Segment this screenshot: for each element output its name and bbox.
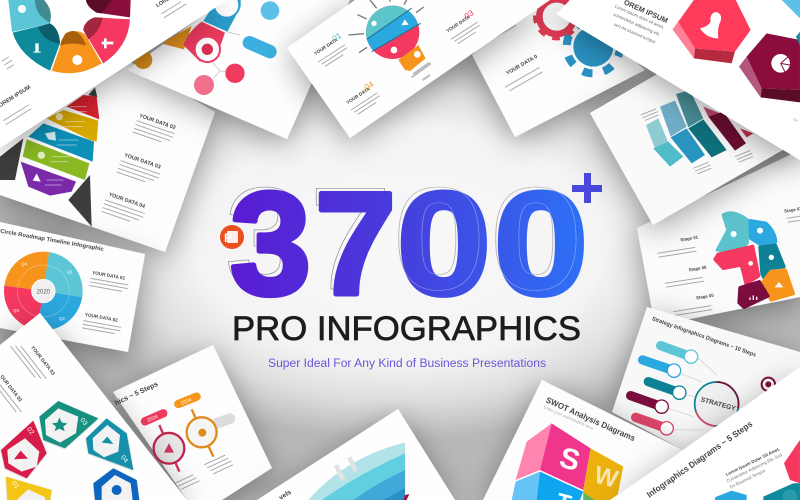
hexagon diagram: 04 bbox=[119, 454, 129, 465]
text: your data 02: YOUR DATA 03 bbox=[123, 153, 161, 171]
gradient digits: 0 bbox=[494, 162, 588, 325]
chart: segmented pie bbox=[8, 0, 131, 73]
chart: roadmap wheel: 2020 bbox=[37, 289, 51, 295]
text: data notes: YOUR DATA 0 bbox=[505, 54, 539, 77]
text: your data 02 bbox=[101, 113, 176, 225]
timeline diagram: 2024 bbox=[146, 414, 159, 424]
chart: roadmap wheel: Q4 bbox=[21, 261, 27, 266]
heading: 5 steps: hics ~ 5 Steps bbox=[114, 381, 159, 407]
gradient digits: 0 bbox=[397, 162, 491, 325]
text: stages: Stage 06 bbox=[688, 264, 707, 272]
panel: 5 steps diagrams card bbox=[610, 367, 800, 500]
text: your data 03 and 02 bbox=[0, 341, 56, 415]
text: your data 01 and 02: YOUR DATA 02 bbox=[84, 312, 119, 323]
rocket diagram bbox=[0, 87, 99, 227]
panel: hexagon steps card bbox=[0, 313, 187, 500]
text: lorem ipsum notes bbox=[0, 0, 186, 125]
light outlines over zeros: 0 bbox=[392, 157, 486, 320]
offset outlines of digits: 3 bbox=[225, 157, 306, 320]
text: your data 03 and 02: YOUR DATA 03 bbox=[29, 345, 56, 377]
heading: SWOT: Enter your subheadline here bbox=[543, 404, 595, 431]
chart: roadmap wheel bbox=[4, 252, 83, 330]
text: lorem ipsum: Consectetur Adipiscing Elit, Sed bbox=[726, 452, 783, 484]
strategy pills bbox=[631, 346, 775, 435]
heading: SWOT: SWOT Analysis Diagrams bbox=[544, 395, 637, 443]
text: data labels: 04 bbox=[362, 79, 376, 92]
strategy ring: STRATEGY bbox=[700, 397, 737, 413]
hexagon diagram bbox=[1, 401, 139, 500]
text: data labels: YOUR DATA bbox=[445, 14, 471, 34]
text: data labels: 01 bbox=[330, 30, 343, 44]
panel: 3D bars card bbox=[590, 55, 800, 225]
hexagon diagram: 02 bbox=[25, 426, 35, 437]
text: your data 02: YOUR DATA 04 bbox=[108, 192, 146, 210]
text: lorem ipsum: Lorem ipsum dolor sit amet, bbox=[614, 4, 665, 30]
icon: PowerPoint badge bbox=[220, 225, 244, 249]
text: stages: Stage 01 bbox=[680, 235, 699, 242]
puzzle diagram bbox=[715, 213, 793, 307]
panel: timeline steps card bbox=[113, 345, 272, 500]
text: data labels bbox=[313, 7, 482, 116]
text: lorem ipsum: Lorem Ipsum Dolor Sit Amet, bbox=[725, 446, 781, 477]
panel: horse puzzle card bbox=[637, 150, 800, 326]
panel: SWOT card bbox=[483, 380, 683, 500]
text: lorem ipsum: consectetur adipiscing elit, bbox=[613, 12, 661, 37]
panel: hexagon 3D card bbox=[556, 0, 800, 160]
text: lorem ipsum: Do Eiusmod Tempor bbox=[729, 468, 767, 490]
chart: roadmap wheel: Q1 bbox=[67, 269, 73, 274]
title: 3700+ bbox=[225, 157, 602, 325]
gradient digits bbox=[230, 162, 588, 325]
SWOT cube: W bbox=[591, 462, 621, 494]
heading: circle roadmap: Circle Roadmap Timeline Infographic bbox=[0, 229, 104, 253]
text: your data 02: YOUR DATA 02 bbox=[138, 113, 176, 131]
offset outlines of digits: 7 bbox=[310, 157, 391, 320]
offset outlines of digits: 0 bbox=[489, 157, 583, 320]
panel: lightbulb card bbox=[287, 0, 550, 138]
text: data labels: YOUR DATA bbox=[345, 86, 371, 105]
text: data notes bbox=[481, 6, 543, 92]
text: your data 01 and 02: YOUR DATA 01 bbox=[92, 270, 126, 281]
subtitle: Super Ideal For Any Kind of Business Presentations bbox=[268, 358, 546, 370]
timeline diagram bbox=[145, 397, 233, 491]
heading: 5 steps diagrams: Infographics Diagrams ~ 5 Steps bbox=[645, 419, 754, 500]
icon: gears bbox=[536, 0, 620, 73]
gradient digits: 3 bbox=[230, 162, 311, 325]
hexagon diagram: 03 bbox=[78, 417, 89, 427]
panel: strategy card bbox=[612, 307, 800, 450]
heading: strategy: Strategy Infographics Diagrams ~ 10 Steps bbox=[651, 316, 757, 359]
text: stages bbox=[657, 206, 800, 316]
text: data notes: ATA 02 bbox=[500, 6, 518, 20]
SWOT cube: S bbox=[556, 441, 583, 478]
panel: rocket infographic card bbox=[0, 60, 215, 252]
offset outlines of digits: 0 bbox=[392, 157, 486, 320]
tree diagram bbox=[134, 0, 279, 95]
text: lorem ipsum bbox=[613, 0, 669, 45]
text: lorem ipsum: sed do eiusmod tempor bbox=[613, 22, 657, 45]
3D bars chart bbox=[641, 90, 754, 174]
SWOT cube bbox=[512, 423, 623, 500]
panel: levels card bbox=[257, 409, 455, 500]
heading: pro infographics: PRO INFOGRAPHICS bbox=[232, 310, 581, 348]
hexagons 3D: Lo bbox=[793, 117, 798, 123]
timeline diagram: 2024 bbox=[180, 397, 193, 407]
light outlines over zeros bbox=[392, 157, 583, 320]
text: your data 01 and 02 bbox=[82, 270, 128, 335]
text: stages: Stage 05 bbox=[696, 292, 715, 300]
chart: roadmap wheel: Q3 bbox=[13, 308, 19, 313]
panel: circle roadmap card bbox=[0, 222, 145, 352]
panel: gears card bbox=[472, 0, 645, 137]
panel: tree diagram card bbox=[127, 0, 350, 139]
plus sign bbox=[572, 173, 602, 203]
panel: segmented pie card bbox=[0, 0, 227, 148]
text: data labels: 03 bbox=[462, 7, 476, 21]
strategy ring bbox=[695, 382, 739, 426]
offset outlines of digits bbox=[225, 157, 583, 320]
text: data labels: YOUR DATA bbox=[313, 37, 339, 56]
light outlines over zeros: 0 bbox=[489, 157, 583, 320]
funnel diagram bbox=[308, 443, 409, 500]
hexagons 3D bbox=[673, 0, 800, 123]
chart: roadmap wheel: Q2 bbox=[59, 316, 65, 321]
icon: PowerPoint badge: P bbox=[224, 231, 232, 245]
icon: lightbulb diagram bbox=[348, 0, 431, 80]
hexagon diagram: 01 bbox=[10, 480, 20, 491]
step shapes bbox=[715, 440, 800, 500]
gradient digits: 7 bbox=[315, 162, 396, 325]
